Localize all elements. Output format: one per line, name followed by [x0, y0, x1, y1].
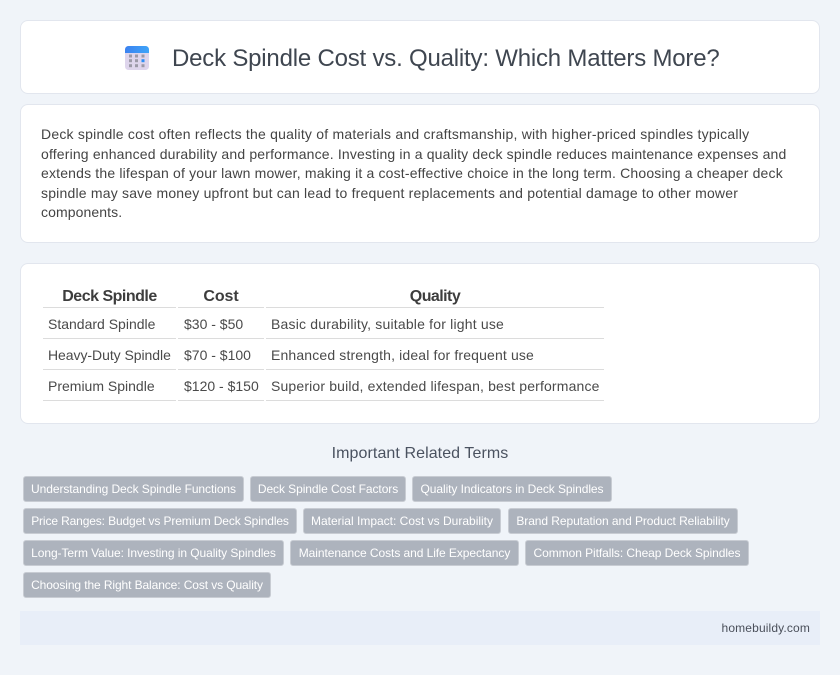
tag	[23, 540, 284, 566]
footer	[20, 611, 820, 645]
tag: Material Impact: Cost vs Durability	[311, 514, 493, 528]
row: standard spindle: Standard Spindle	[48, 316, 155, 332]
related term tags	[23, 476, 749, 598]
tag	[290, 540, 519, 566]
row: standard spindle	[43, 307, 604, 332]
row: premium spindle	[43, 369, 604, 401]
row: heavy-duty spindle: Enhanced strength, ideal for frequent use	[271, 347, 534, 363]
panel: intro text	[20, 104, 820, 243]
panel: comparison table	[20, 263, 820, 424]
row: heavy-duty spindle: Heavy-Duty Spindle	[48, 347, 171, 363]
tag: Quality Indicators in Deck Spindles	[420, 482, 603, 496]
tag: Long-Term Value: Investing in Quality Spindles	[31, 546, 276, 560]
tag	[23, 508, 297, 534]
table header: Quality	[410, 288, 460, 305]
table header: Cost	[203, 288, 239, 305]
tag	[23, 476, 244, 502]
row: premium spindle: $120 - $150	[184, 378, 259, 394]
tag	[412, 476, 612, 502]
row: premium spindle: Superior build, extended lifespan, best performance	[271, 378, 600, 394]
tag	[303, 508, 501, 534]
tag: Choosing the Right Balance: Cost vs Quality	[31, 578, 263, 592]
tag: Maintenance Costs and Life Expectancy	[299, 546, 510, 560]
intro paragraph: offering enhanced durability and performance. Investing in a quality deck spindle reduces maintenance expenses and	[41, 146, 786, 162]
intro paragraph: extends the lifespan of your lawn mower, making it a cost-effective choice in the long term. Choosing a cheaper deck	[41, 165, 783, 181]
row: standard spindle: $30 - $50	[184, 316, 243, 332]
row: heavy-duty spindle	[43, 338, 604, 363]
footer source text: homebuildy.com	[722, 621, 810, 635]
tag: Price Ranges: Budget vs Premium Deck Spindles	[31, 514, 289, 528]
icon: calendar	[125, 46, 149, 70]
heading: related terms: Important Related Terms	[332, 445, 508, 462]
intro paragraph: components.	[41, 204, 122, 220]
row: standard spindle: Basic durability, suitable for light use	[271, 316, 504, 332]
tag	[508, 508, 738, 534]
intro paragraph: spindle may save money upfront but can lead to frequent replacements and potential damage to other mower	[41, 184, 738, 200]
row: premium spindle: Premium Spindle	[48, 378, 155, 394]
intro paragraph	[41, 126, 786, 220]
tag	[250, 476, 406, 502]
tag	[23, 572, 271, 598]
tag: Common Pitfalls: Cheap Deck Spindles	[534, 546, 740, 560]
tag	[525, 540, 749, 566]
table header: Deck Spindle	[62, 288, 157, 305]
tag: Brand Reputation and Product Reliability	[516, 514, 730, 528]
row: heavy-duty spindle: $70 - $100	[184, 347, 251, 363]
tag: Deck Spindle Cost Factors	[258, 482, 398, 496]
title: Deck Spindle Cost vs. Quality: Which Matters More?	[172, 45, 720, 72]
header panel	[20, 20, 820, 94]
intro paragraph: Deck spindle cost often reflects the quality of materials and craftsmanship, with higher-priced spindles typically	[41, 126, 749, 142]
table header	[62, 288, 461, 305]
tag: Understanding Deck Spindle Functions	[31, 482, 236, 496]
